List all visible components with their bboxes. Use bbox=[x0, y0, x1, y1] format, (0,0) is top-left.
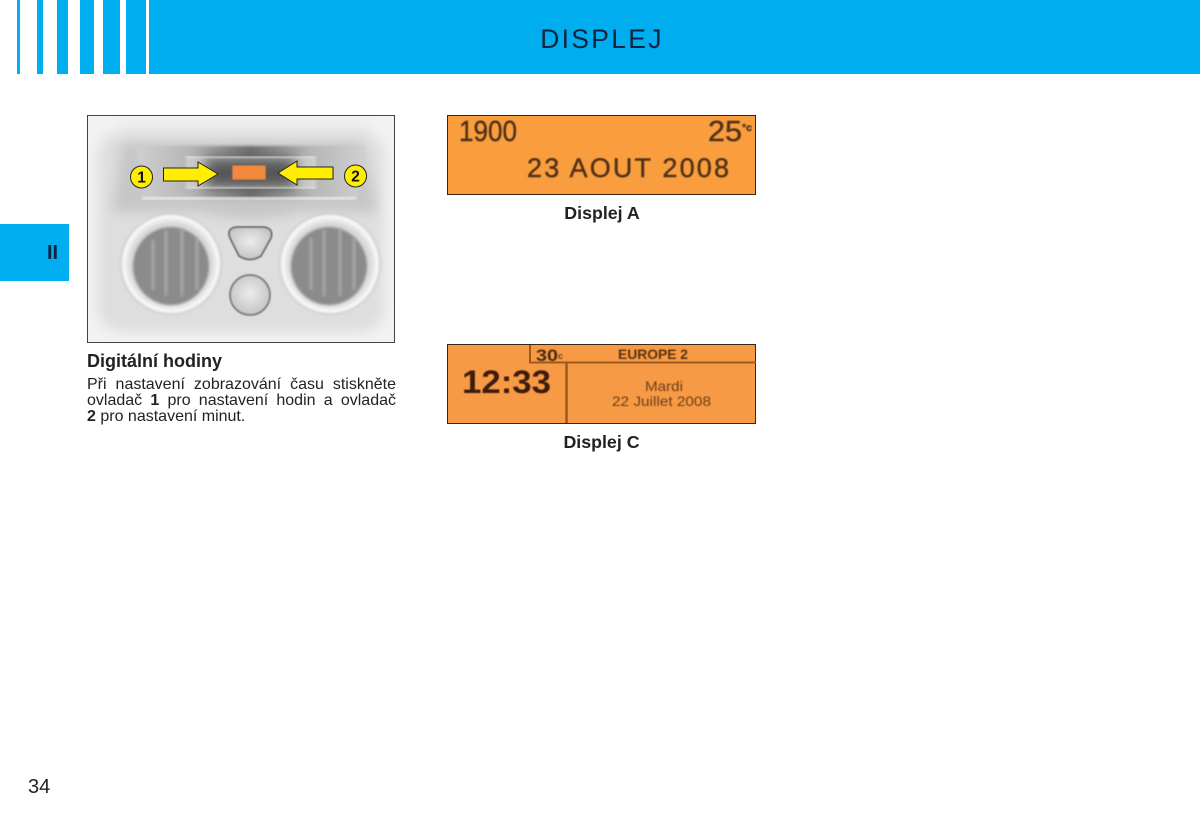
hazard button bbox=[229, 227, 272, 260]
temperature unit C: c bbox=[558, 351, 563, 361]
marker 2 bbox=[344, 165, 366, 187]
chapter tab bbox=[0, 224, 69, 281]
arrow 2 bbox=[278, 161, 333, 185]
photo: dashboard with clock display bbox=[87, 115, 395, 343]
temperature C: 30 bbox=[536, 346, 558, 365]
right air vent bbox=[280, 214, 380, 314]
display hood bbox=[136, 146, 365, 200]
left air vent bbox=[121, 214, 221, 314]
day C: Mardi bbox=[645, 378, 683, 394]
marker 2: 2 bbox=[351, 168, 360, 186]
body text bbox=[87, 376, 396, 425]
caption: Displej C: Displej C bbox=[563, 432, 640, 452]
display A screen bbox=[447, 115, 756, 195]
caption: Displej A: Displej A bbox=[564, 203, 640, 223]
round button bbox=[230, 275, 270, 315]
marker 1 bbox=[130, 166, 152, 188]
time C: 12:33 bbox=[462, 364, 551, 400]
marker 1: 1 bbox=[137, 170, 146, 186]
body text: 2 pro nastavení minut. bbox=[87, 408, 245, 425]
header band bbox=[17, 0, 1200, 74]
radio station: EUROPE 2 bbox=[618, 346, 688, 362]
display C screen bbox=[447, 344, 756, 424]
heading: Digitální hodiny: Digitální hodiny bbox=[87, 351, 222, 371]
temperature A: 25 bbox=[708, 116, 742, 148]
body text: ovladač 1 pro nastavení hodin a ovladač bbox=[87, 392, 396, 409]
orange clock screen bbox=[232, 165, 266, 180]
body text: Při nastavení zobrazování času stiskněte bbox=[87, 376, 396, 393]
title: DISPLEJ bbox=[540, 24, 664, 54]
temperature unit A: °c bbox=[742, 123, 752, 134]
date A: 23 AOUT 2008 bbox=[527, 153, 729, 183]
time A: 1900 bbox=[459, 116, 517, 148]
arrow 1 bbox=[164, 162, 218, 186]
frame bbox=[88, 116, 394, 342]
date C: 22 Juillet 2008 bbox=[612, 393, 711, 409]
page number: 34 bbox=[28, 776, 50, 798]
chapter number: II bbox=[47, 242, 58, 264]
